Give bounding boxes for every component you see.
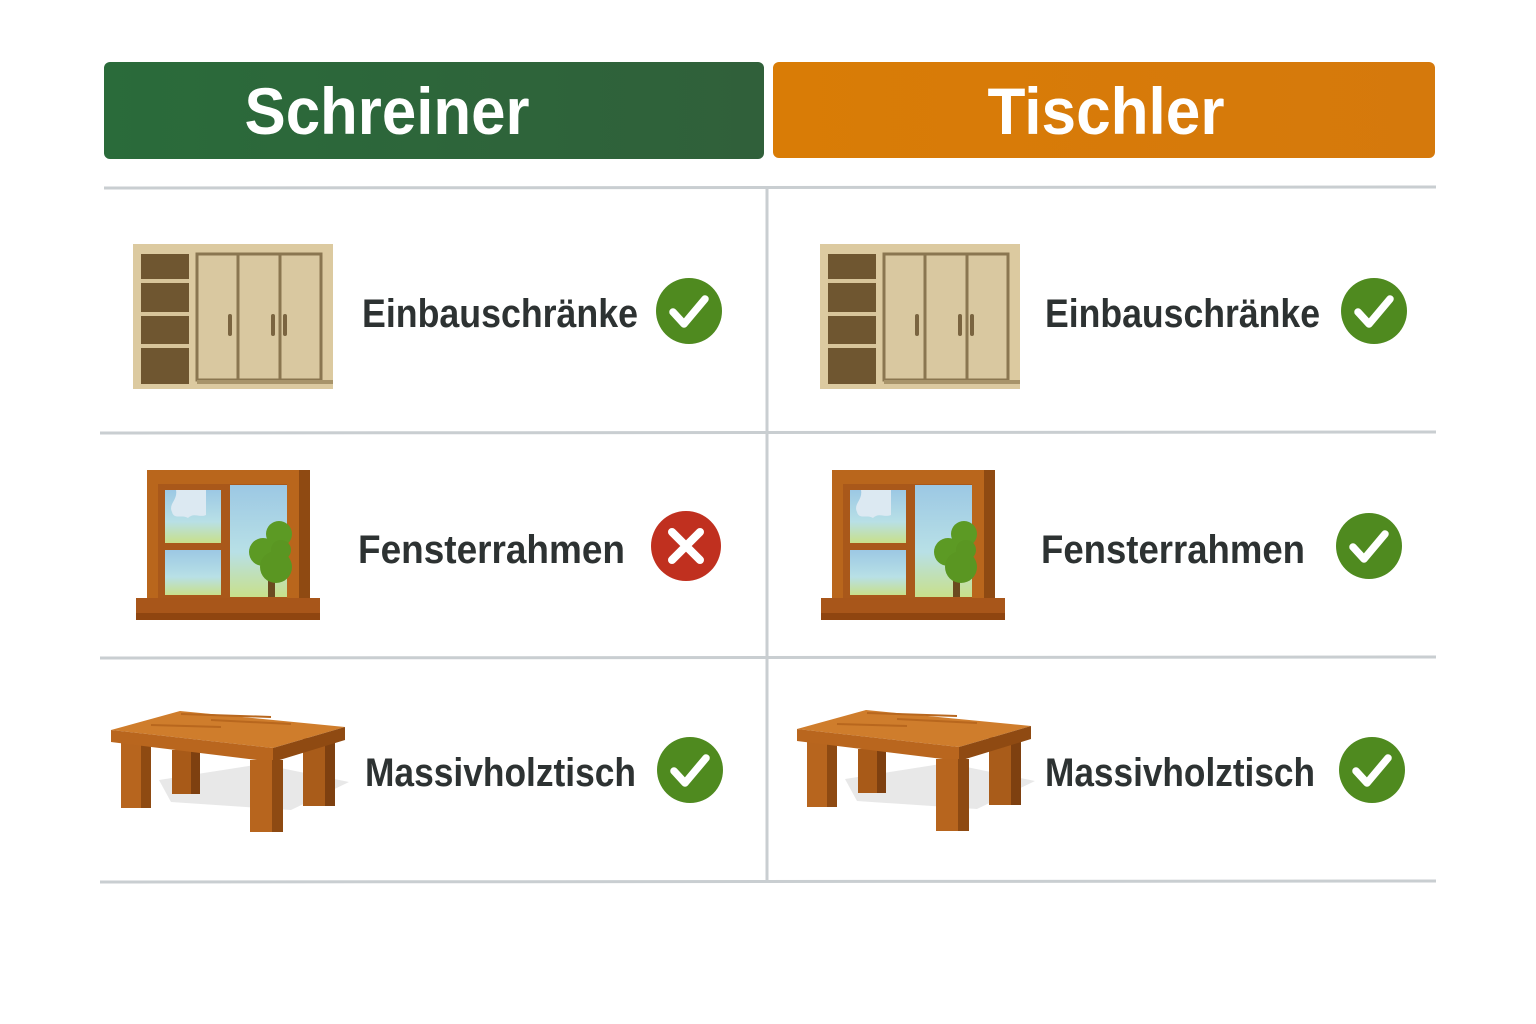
- label: Einbauschränke: Einbauschränke: [1045, 292, 1320, 336]
- icon: table: [797, 710, 1035, 831]
- icon: cross: [651, 511, 721, 581]
- row: Schreiner Einbauschränke: [133, 244, 722, 389]
- header: Tischler: Tischler: [988, 74, 1224, 148]
- header: Schreiner: Schreiner: [244, 74, 530, 148]
- icon: check: [656, 278, 722, 344]
- icon: table: [111, 711, 349, 832]
- label: Massivholztisch: Massivholztisch: [365, 751, 636, 795]
- row: Tischler Fensterrahmen: [821, 470, 1402, 620]
- label: Fensterrahmen: Fensterrahmen: [1041, 528, 1305, 572]
- icon: built-in cabinet: [133, 244, 333, 389]
- icon: window: [136, 470, 320, 620]
- icon: check: [1339, 737, 1405, 803]
- header: Schreiner: [104, 62, 764, 159]
- row: Schreiner Fensterrahmen: [136, 470, 721, 620]
- icon: check: [657, 737, 723, 803]
- icon: built-in cabinet: [820, 244, 1020, 389]
- icon: window: [821, 470, 1005, 620]
- header: Tischler: [773, 62, 1435, 158]
- label: Fensterrahmen: Fensterrahmen: [358, 528, 625, 572]
- label: Einbauschränke: Einbauschränke: [362, 292, 638, 336]
- label: Massivholztisch: Massivholztisch: [1045, 751, 1315, 795]
- row: Tischler Einbauschränke: [820, 244, 1407, 389]
- icon: check: [1336, 513, 1402, 579]
- icon: check: [1341, 278, 1407, 344]
- row: Schreiner Massivholztisch: [111, 711, 723, 832]
- row: Tischler Massivholztisch: [797, 710, 1405, 831]
